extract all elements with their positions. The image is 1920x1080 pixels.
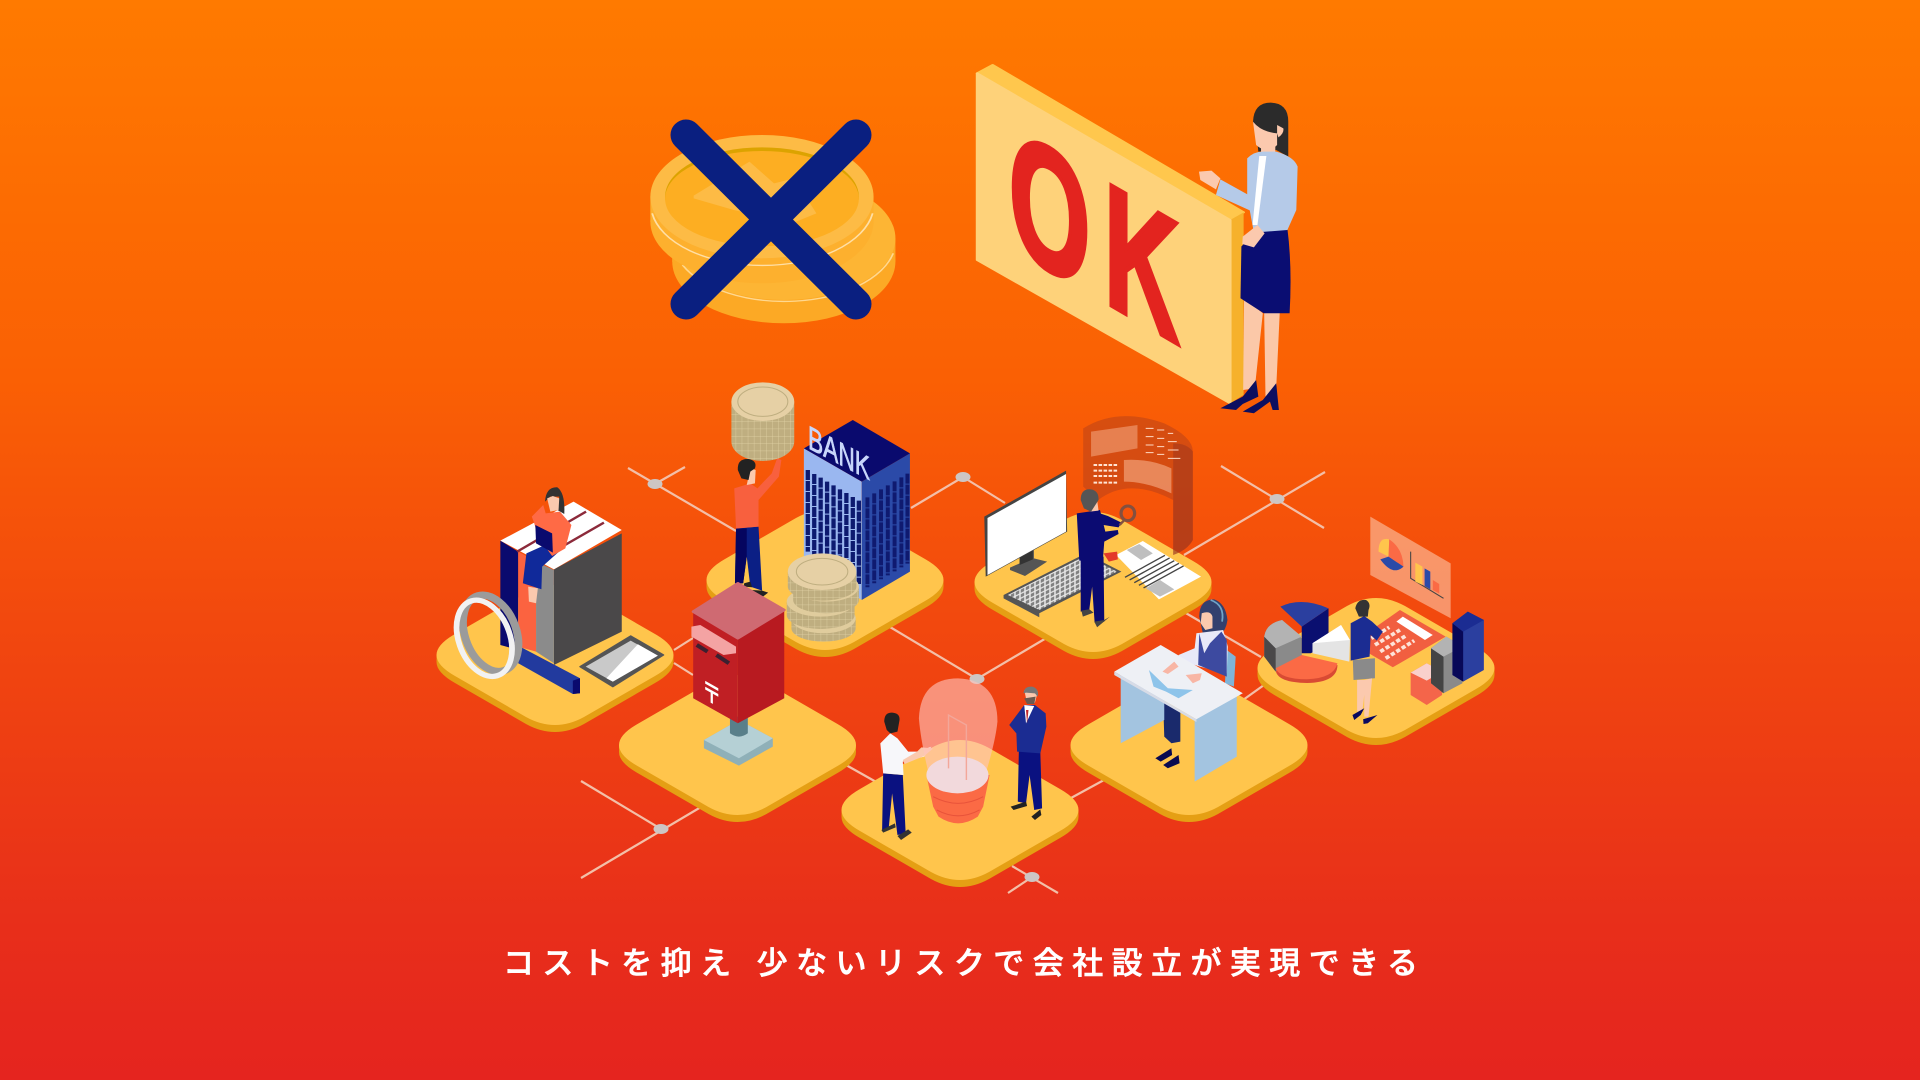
icon: navy cross mark bbox=[686, 135, 856, 304]
keyboard bbox=[1004, 553, 1121, 617]
network connector lines bbox=[581, 466, 1325, 893]
panel: monitor platform bbox=[974, 416, 1212, 659]
panel: bank platform bbox=[706, 382, 944, 657]
woman presenting bbox=[1199, 103, 1298, 413]
BANK sign text: BANK bbox=[808, 419, 870, 488]
platform tile bbox=[974, 512, 1212, 659]
glowing lightbulb bbox=[919, 678, 997, 823]
woman on the phone bbox=[523, 487, 571, 603]
office desk bbox=[1114, 645, 1243, 782]
OK text: OK bbox=[1009, 88, 1193, 390]
calculator bbox=[1366, 610, 1446, 667]
red mail post bbox=[691, 583, 784, 766]
platform tile bbox=[619, 675, 856, 822]
caption text: コストを抑え 少ないリスクで会社設立が実現できる bbox=[503, 946, 1418, 981]
icon: coins crossed out bbox=[650, 135, 895, 323]
bank building bbox=[804, 419, 910, 600]
OK sign board bbox=[977, 65, 1244, 403]
network nodes bbox=[648, 472, 1284, 882]
laptop bbox=[1149, 670, 1193, 698]
man with magnifier bbox=[1077, 489, 1135, 627]
woman with calculator bbox=[1351, 600, 1383, 724]
floating chart board bbox=[1370, 517, 1451, 618]
OK board with woman bbox=[977, 65, 1298, 413]
bar blocks bbox=[1411, 612, 1484, 705]
platform tile bbox=[706, 510, 944, 657]
computer monitor bbox=[984, 471, 1067, 577]
document sheet bbox=[1104, 541, 1201, 599]
call-centre operator bbox=[1155, 599, 1236, 768]
platform tile bbox=[436, 585, 674, 732]
panel: books platform bbox=[436, 487, 674, 732]
postal mark: 〒 bbox=[702, 668, 721, 716]
man lifting coins bbox=[734, 458, 781, 597]
panel: charts platform bbox=[1258, 517, 1494, 745]
tablet bbox=[580, 636, 664, 687]
stacked coins bbox=[787, 553, 859, 642]
man in navy suit bbox=[1009, 687, 1046, 820]
icon: gold coins bbox=[650, 135, 895, 323]
panel: lightbulb platform bbox=[842, 678, 1078, 887]
platform tile bbox=[842, 740, 1078, 887]
stacked books bbox=[500, 502, 622, 665]
man in white shirt bbox=[880, 713, 933, 840]
platform tile bbox=[1258, 598, 1494, 745]
holographic data panel bbox=[1083, 416, 1193, 555]
pie chart blocks bbox=[1264, 602, 1350, 683]
panel: post box platform bbox=[619, 583, 856, 822]
platform tile bbox=[1070, 675, 1308, 822]
panel: operator desk platform bbox=[1070, 599, 1308, 822]
magnifying glass bbox=[447, 588, 580, 694]
coin stack held up bbox=[731, 382, 794, 461]
